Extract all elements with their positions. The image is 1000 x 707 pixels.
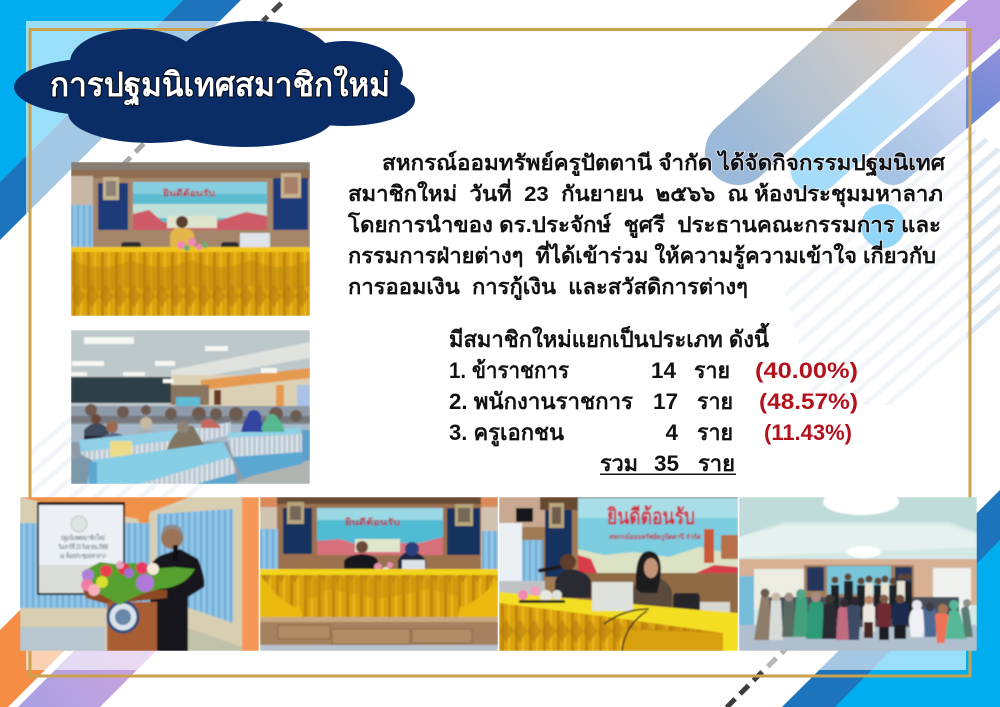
intro paragraph bbox=[347, 150, 945, 301]
total bbox=[600, 451, 736, 476]
photo: chairman at yellow table bbox=[71, 162, 310, 316]
photo: welcome banner and two presenters close-up: ยินดีต้อนรับ bbox=[607, 504, 695, 529]
row: private school teachers: (11.43%) bbox=[764, 420, 852, 445]
row: private school teachers: 3. ครูเอกชน bbox=[449, 420, 565, 447]
photo: speaker at podium: วันเสาร์ที่ 23 กันยายน 2566 bbox=[58, 542, 108, 551]
photo: two presenters at long yellow table bbox=[260, 497, 498, 651]
member types list bbox=[449, 322, 858, 476]
row: government employees: (48.57%) bbox=[759, 389, 858, 414]
intro paragraph: สมาชิกใหม่ วันที่ 23 กันยายน ๒๕๖๖ ณ ห้องประชุมมหาลาภ bbox=[348, 178, 943, 208]
row: government employees: 2. พนักงานราชการ bbox=[449, 389, 633, 414]
total: 35 bbox=[654, 451, 679, 476]
photo: new members seated in hall bbox=[71, 330, 310, 484]
row: government officials: ราย bbox=[694, 358, 730, 383]
intro paragraph: โดยการนำของ ดร.ประจักษ์ ชูศรี ประธานคณะกรรมการ และ bbox=[347, 211, 941, 239]
row: government employees: ราย bbox=[697, 389, 733, 414]
photo: chairman at yellow table: ยินดีต้อนรับ bbox=[162, 188, 215, 198]
row: government officials: 1. ข้าราชการ bbox=[449, 358, 569, 383]
title cloud badge bbox=[14, 21, 415, 147]
photo: two presenters at long yellow table: ยินดีต้อนรับ bbox=[344, 517, 400, 527]
total: ราย bbox=[698, 451, 735, 476]
total: รวม bbox=[600, 451, 638, 476]
intro paragraph: สหกรณ์ออมทรัพย์ครูปัตตานี จำกัด ได้จัดกิจกรรมปฐมนิเทศ bbox=[382, 150, 945, 177]
row: government officials: (40.00%) bbox=[755, 358, 858, 383]
intro paragraph: กรรมการฝ่ายต่างๆ ที่ได้เข้าร่วม ให้ความรู้ความเข้าใจ เกี่ยวกับ bbox=[348, 240, 936, 270]
photo: speaker at podium: ปฐมนิเทศสมาชิกใหม่ bbox=[61, 533, 105, 542]
intro paragraph: การออมเงิน การกู้เงิน และสวัสดิการต่างๆ bbox=[348, 275, 748, 301]
row: private school teachers: ราย bbox=[697, 420, 733, 445]
row: government employees bbox=[449, 389, 858, 414]
row: government officials bbox=[449, 358, 858, 383]
photo: speaker at podium bbox=[20, 497, 259, 651]
photo: welcome banner and two presenters close-up bbox=[499, 497, 738, 651]
list heading: มีสมาชิกใหม่แยกเป็นประเภท ดังนี้ bbox=[449, 322, 770, 352]
row: private school teachers bbox=[449, 420, 852, 447]
photo: group picture of new members bbox=[739, 497, 977, 651]
row: government employees: 17 bbox=[653, 389, 678, 414]
title: การปฐมนิเทศสมาชิกใหม่ bbox=[50, 65, 390, 106]
row: private school teachers: 4 bbox=[665, 420, 678, 445]
photo: welcome banner and two presenters close-up: สหกรณ์ออมทรัพย์ครูปัตตานี จำกัด bbox=[609, 532, 701, 542]
row: government officials: 14 bbox=[651, 358, 676, 383]
photo: speaker at podium: ณ ห้องประชุมมหาลาภ bbox=[60, 552, 106, 560]
